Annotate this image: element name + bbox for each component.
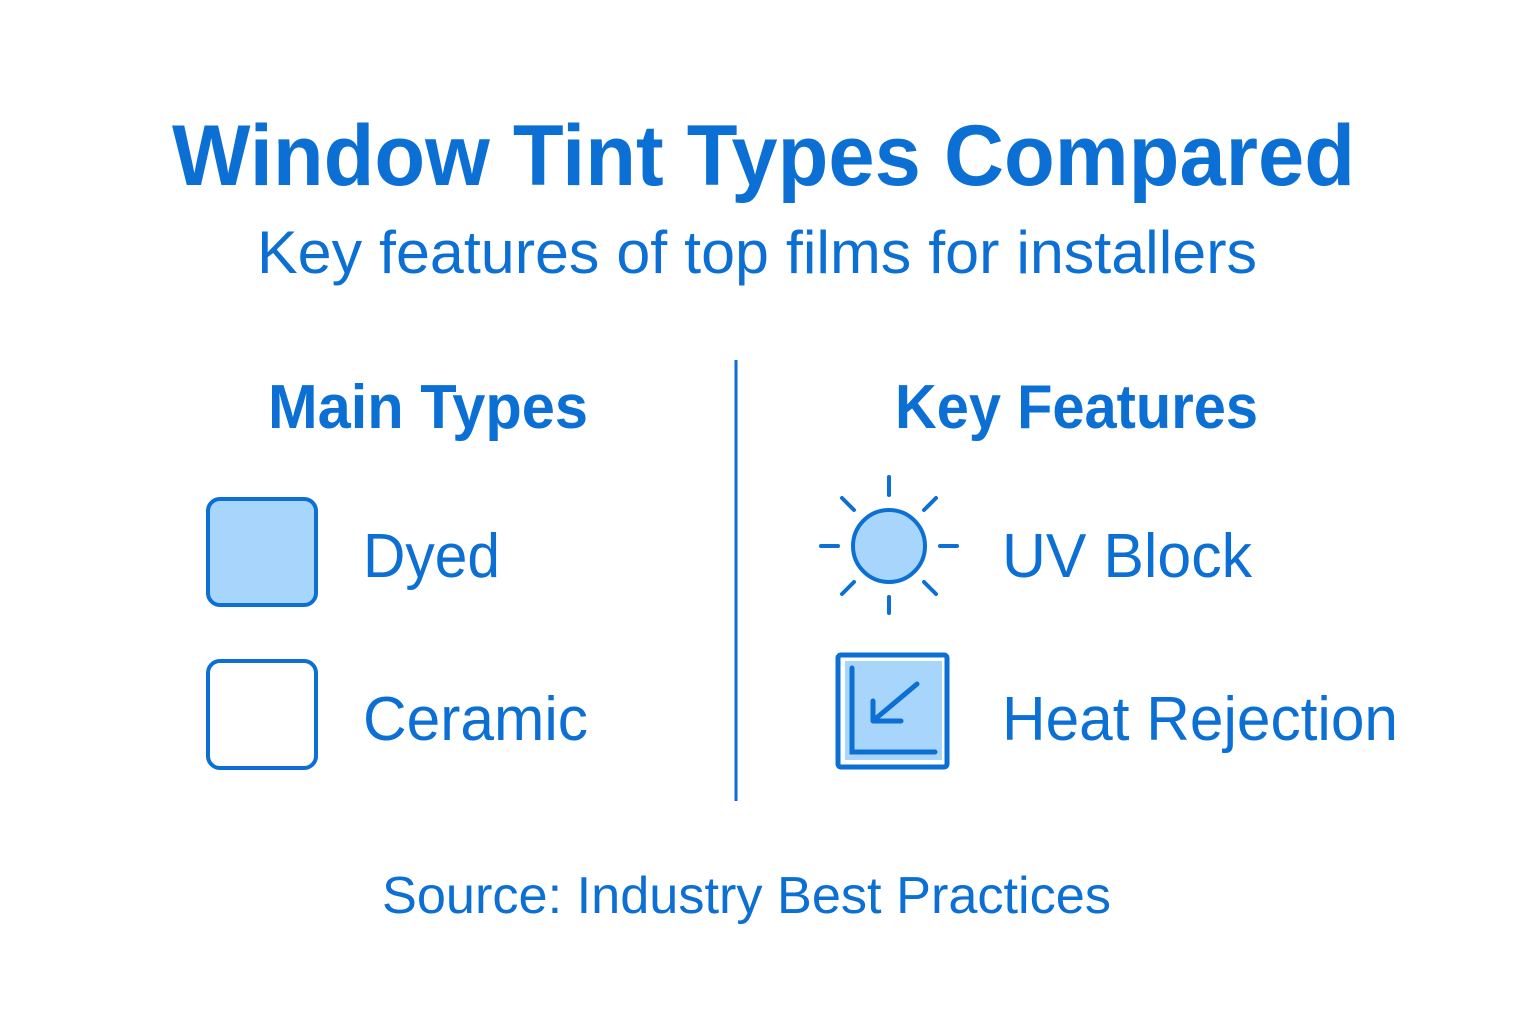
label: dyed: Dyed — [363, 522, 500, 591]
subtitle: Key features of top films for installers — [257, 219, 1257, 286]
label: uv block: UV Block — [1002, 522, 1253, 591]
divider — [734, 360, 738, 801]
icon: dyed swatch — [208, 499, 316, 605]
title: Window Tint Types Compared — [172, 108, 1355, 204]
panel: key features — [821, 373, 1398, 767]
heading: key features: Key Features — [895, 373, 1258, 442]
icon: heat rejection — [838, 655, 947, 767]
source: Source: Industry Best Practices — [382, 867, 1111, 925]
icon: ceramic swatch — [208, 661, 316, 768]
panel: main types — [208, 373, 588, 768]
label: ceramic: Ceramic — [363, 685, 588, 754]
heading: main types: Main Types — [268, 373, 588, 442]
icon: sun — [821, 477, 957, 613]
label: heat rejection: Heat Rejection — [1002, 685, 1398, 754]
